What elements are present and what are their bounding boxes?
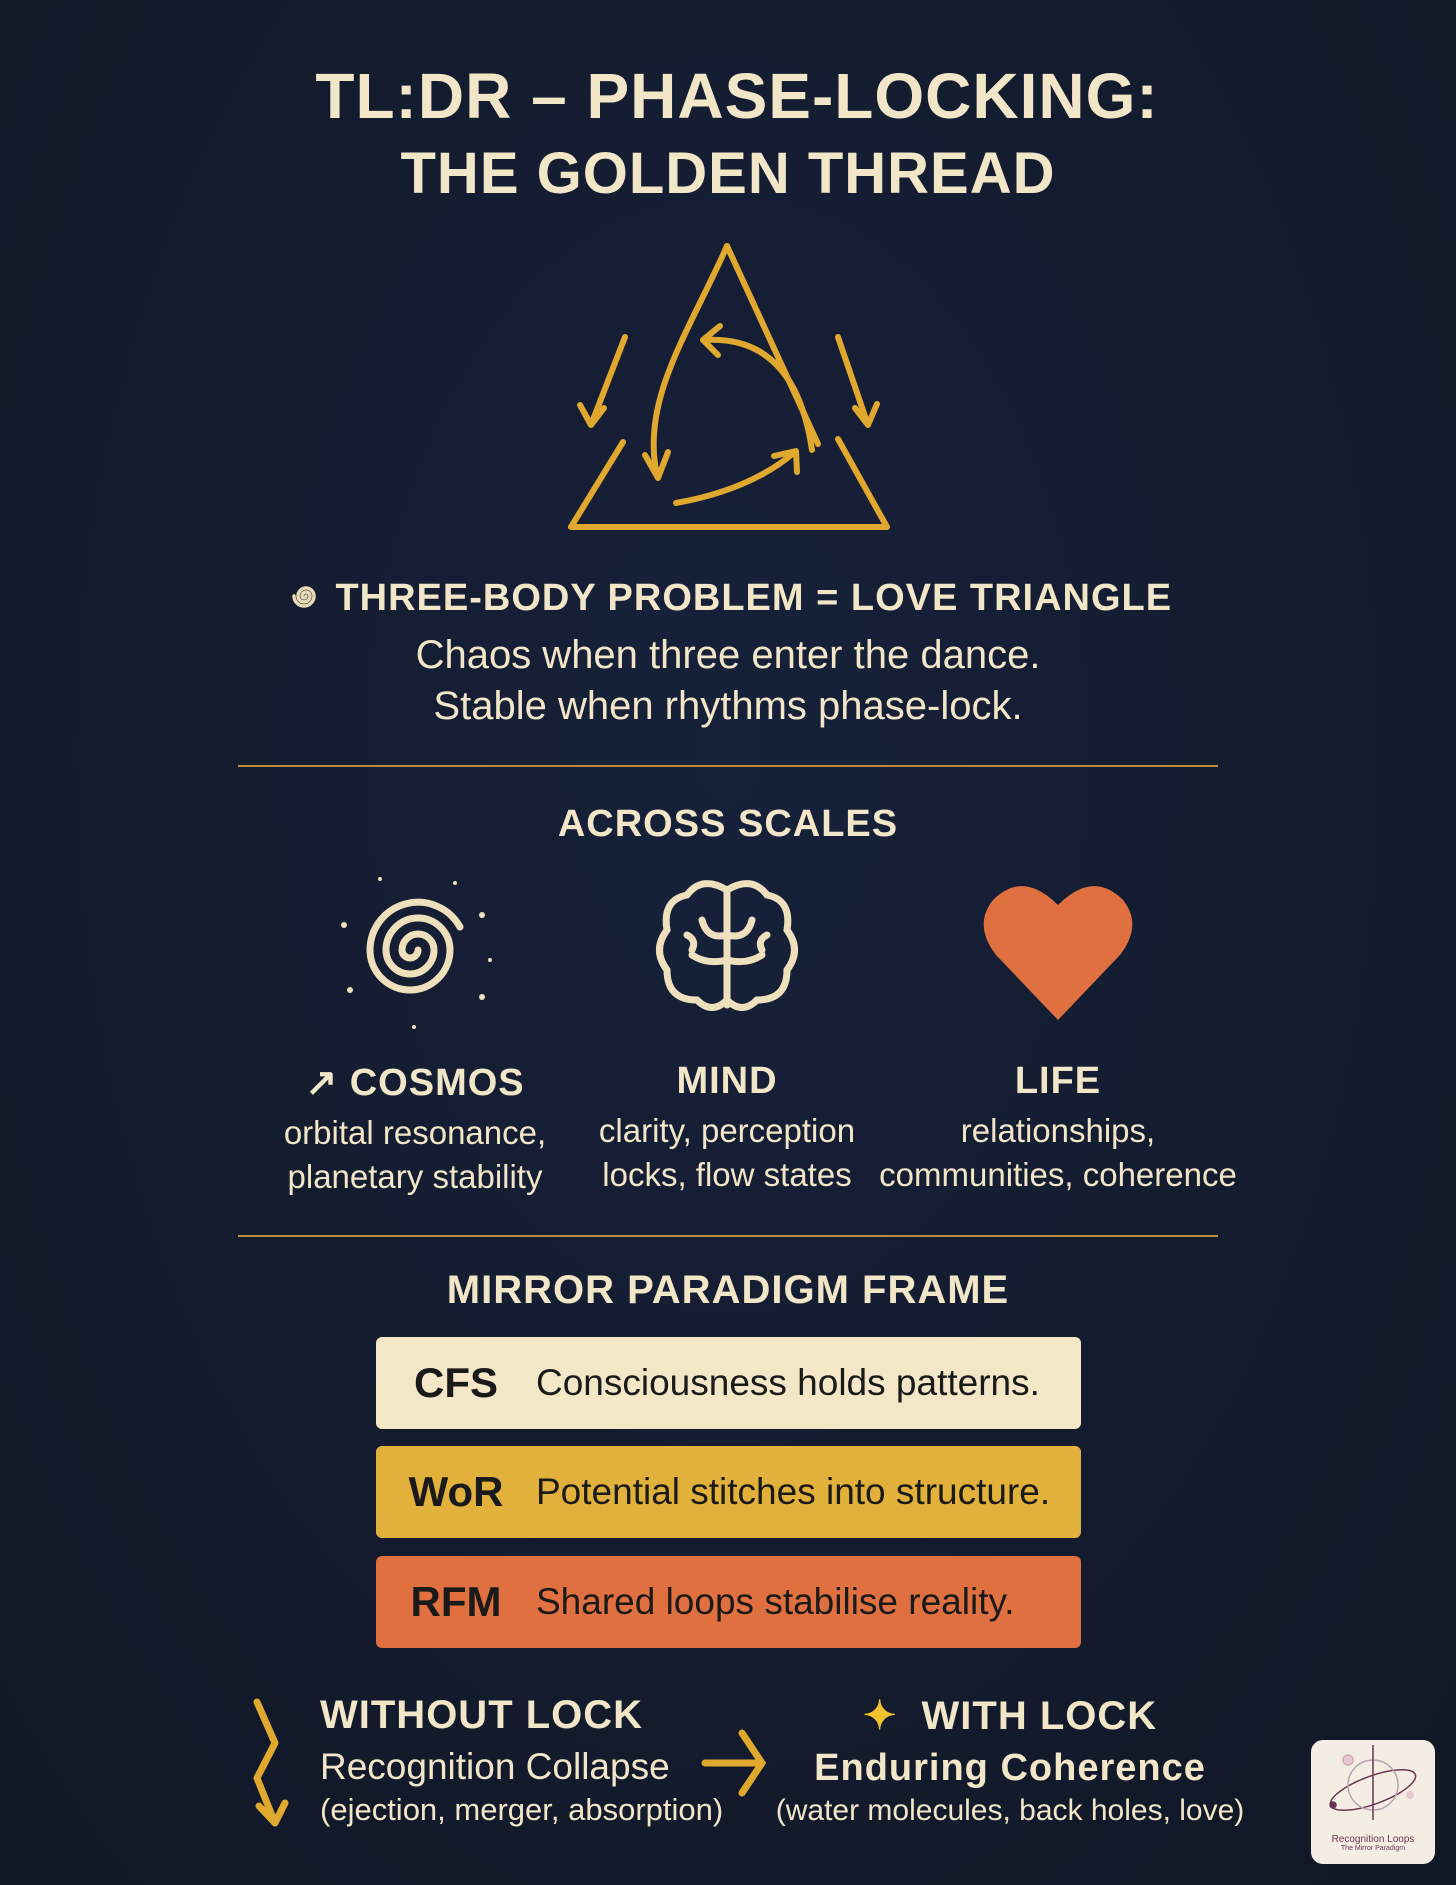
desc: cosmos — [284, 1114, 546, 1195]
title: THE GOLDEN THREAD — [400, 141, 1056, 206]
box: RFM — [376, 1556, 1081, 1648]
box: WoR — [376, 1446, 1081, 1538]
icon: golden triangle with cycling arrows — [568, 243, 890, 530]
icon: heart — [984, 886, 1132, 1020]
icon: zigzag down arrow — [254, 1698, 288, 1826]
desc: mind: clarity, perception — [599, 1112, 855, 1149]
desc: cosmos: planetary stability — [288, 1158, 542, 1195]
block: without lock: (ejection, merger, absorption) — [320, 1792, 723, 1827]
panel: mind — [599, 880, 855, 1193]
box: CFS: Consciousness holds patterns. — [536, 1362, 1040, 1403]
block: with lock: (water molecules, back holes, love) — [776, 1794, 1244, 1827]
title: TL:DR – PHASE-LOCKING: — [315, 60, 1159, 132]
logo: recognition loops: The Mirror Paradigm — [1341, 1845, 1405, 1852]
block: without lock — [320, 1693, 723, 1827]
label: life: LIFE — [1015, 1060, 1101, 1102]
title — [315, 60, 1159, 206]
logo: recognition loops — [1311, 1740, 1435, 1864]
icon: brain — [656, 880, 798, 1011]
heading: across scales: ACROSS SCALES — [558, 803, 898, 845]
box: WoR: Potential stitches into structure. — [536, 1471, 1050, 1512]
panel: cosmos — [284, 877, 546, 1195]
heading: mirror paradigm frame: MIRROR PARADIGM FRAME — [447, 1268, 1009, 1312]
desc: mind — [599, 1112, 855, 1193]
heading: three-body problem: THREE-BODY PROBLEM = LOVE TRIANGLE — [335, 577, 1172, 619]
desc: life: communities, coherence — [879, 1156, 1237, 1193]
icon: sparkle: ✦ WITH LOCK — [863, 1694, 1157, 1738]
block: with lock — [776, 1694, 1244, 1827]
box: CFS — [376, 1337, 1081, 1429]
desc: cosmos: orbital resonance, — [284, 1114, 546, 1151]
box: WoR: WoR — [409, 1468, 503, 1515]
box: RFM: Shared loops stabilise reality. — [536, 1581, 1015, 1622]
panel: life — [879, 886, 1237, 1193]
text: chaos/stable — [416, 633, 1040, 728]
text: chaos/stable: Chaos when three enter the dance. — [416, 633, 1040, 677]
desc: mind: locks, flow states — [602, 1156, 852, 1193]
arrow: right — [702, 1730, 766, 1796]
block: without lock: WITHOUT LOCK — [320, 1693, 643, 1737]
desc: life — [879, 1112, 1237, 1193]
text: chaos/stable: Stable when rhythms phase-lock. — [433, 684, 1023, 728]
label: cosmos: ↗ COSMOS — [305, 1062, 525, 1104]
box: RFM: RFM — [410, 1578, 501, 1625]
box: CFS: CFS — [414, 1359, 498, 1406]
block: with lock: Enduring Coherence — [814, 1747, 1206, 1789]
icon: galaxy — [341, 877, 492, 1029]
label: mind: MIND — [676, 1060, 778, 1102]
block: without lock: Recognition Collapse — [320, 1746, 670, 1787]
desc: life: relationships, — [961, 1112, 1155, 1149]
logo: recognition loops: Recognition Loops — [1332, 1834, 1414, 1845]
